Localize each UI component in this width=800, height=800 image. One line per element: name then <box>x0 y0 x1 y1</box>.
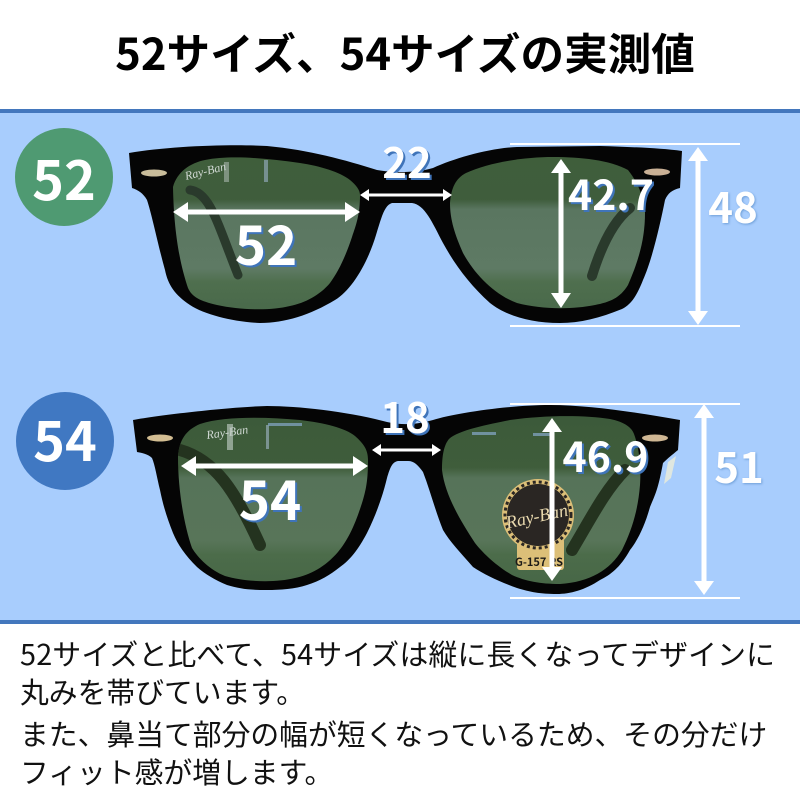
sunglasses: size 52: Ray-Ban <box>182 159 227 183</box>
badge: 54: 54 <box>33 398 97 477</box>
measurement labels outside frames: 48 <box>708 175 758 236</box>
reference lines: 52 <box>510 143 740 327</box>
text block: explanation: 52サイズと比べて、54サイズは縦に長くなってデザインに <box>20 632 775 674</box>
badge: 52: 52 <box>32 137 96 216</box>
text block: explanation <box>20 632 775 792</box>
badge: 54 <box>16 392 114 490</box>
bottom border <box>0 620 800 624</box>
measurement labels on lenses <box>235 130 654 536</box>
reference lines: 54 <box>510 403 740 599</box>
blue background <box>0 110 800 622</box>
arrow: bridge 18 <box>372 444 441 456</box>
measurement labels outside frames: 51 <box>714 435 764 496</box>
arrow: lens height 42.7 <box>551 159 571 308</box>
arrow: lens width 52 <box>173 202 360 222</box>
panel: measurements <box>0 109 800 624</box>
sunglasses: size 52 <box>129 145 682 323</box>
sunglasses: size 54 <box>133 405 680 594</box>
icon: Ray-Ban lens sticker <box>502 479 574 570</box>
arrow: total height 48 <box>688 147 708 325</box>
measurement labels on lenses: 54 <box>239 460 301 536</box>
measurement labels outside frames <box>708 175 764 496</box>
top border <box>0 109 800 113</box>
badge: 52 <box>15 128 113 226</box>
arrow: total height 51 <box>694 404 714 595</box>
arrow: lens height 46.9 <box>542 418 562 581</box>
text block: explanation: 丸みを帯びています。 <box>20 671 305 712</box>
sunglasses: size 54: Ray-Ban <box>204 422 249 442</box>
arrow: lens width 54 <box>181 456 368 476</box>
measurement labels on lenses: 18 <box>380 385 430 446</box>
measurement labels on lenses: 52 <box>235 205 297 281</box>
title: 52サイズ、54サイズの実測値 <box>115 19 695 83</box>
measurement labels on lenses: 22 <box>382 130 432 191</box>
text block: explanation: フィット感が増します。 <box>20 751 333 792</box>
arrow: bridge 22 <box>360 189 452 201</box>
icon: Ray-Ban lens sticker: G-157 RS <box>515 554 563 570</box>
text block: explanation: また、鼻当て部分の幅が短くなっているため、その分だけ <box>20 712 767 754</box>
icon: Ray-Ban lens sticker: Ray-Ban <box>503 500 570 533</box>
measurement labels on lenses: 46.9 <box>563 424 648 484</box>
measurement labels on lenses: 42.7 <box>568 162 654 222</box>
